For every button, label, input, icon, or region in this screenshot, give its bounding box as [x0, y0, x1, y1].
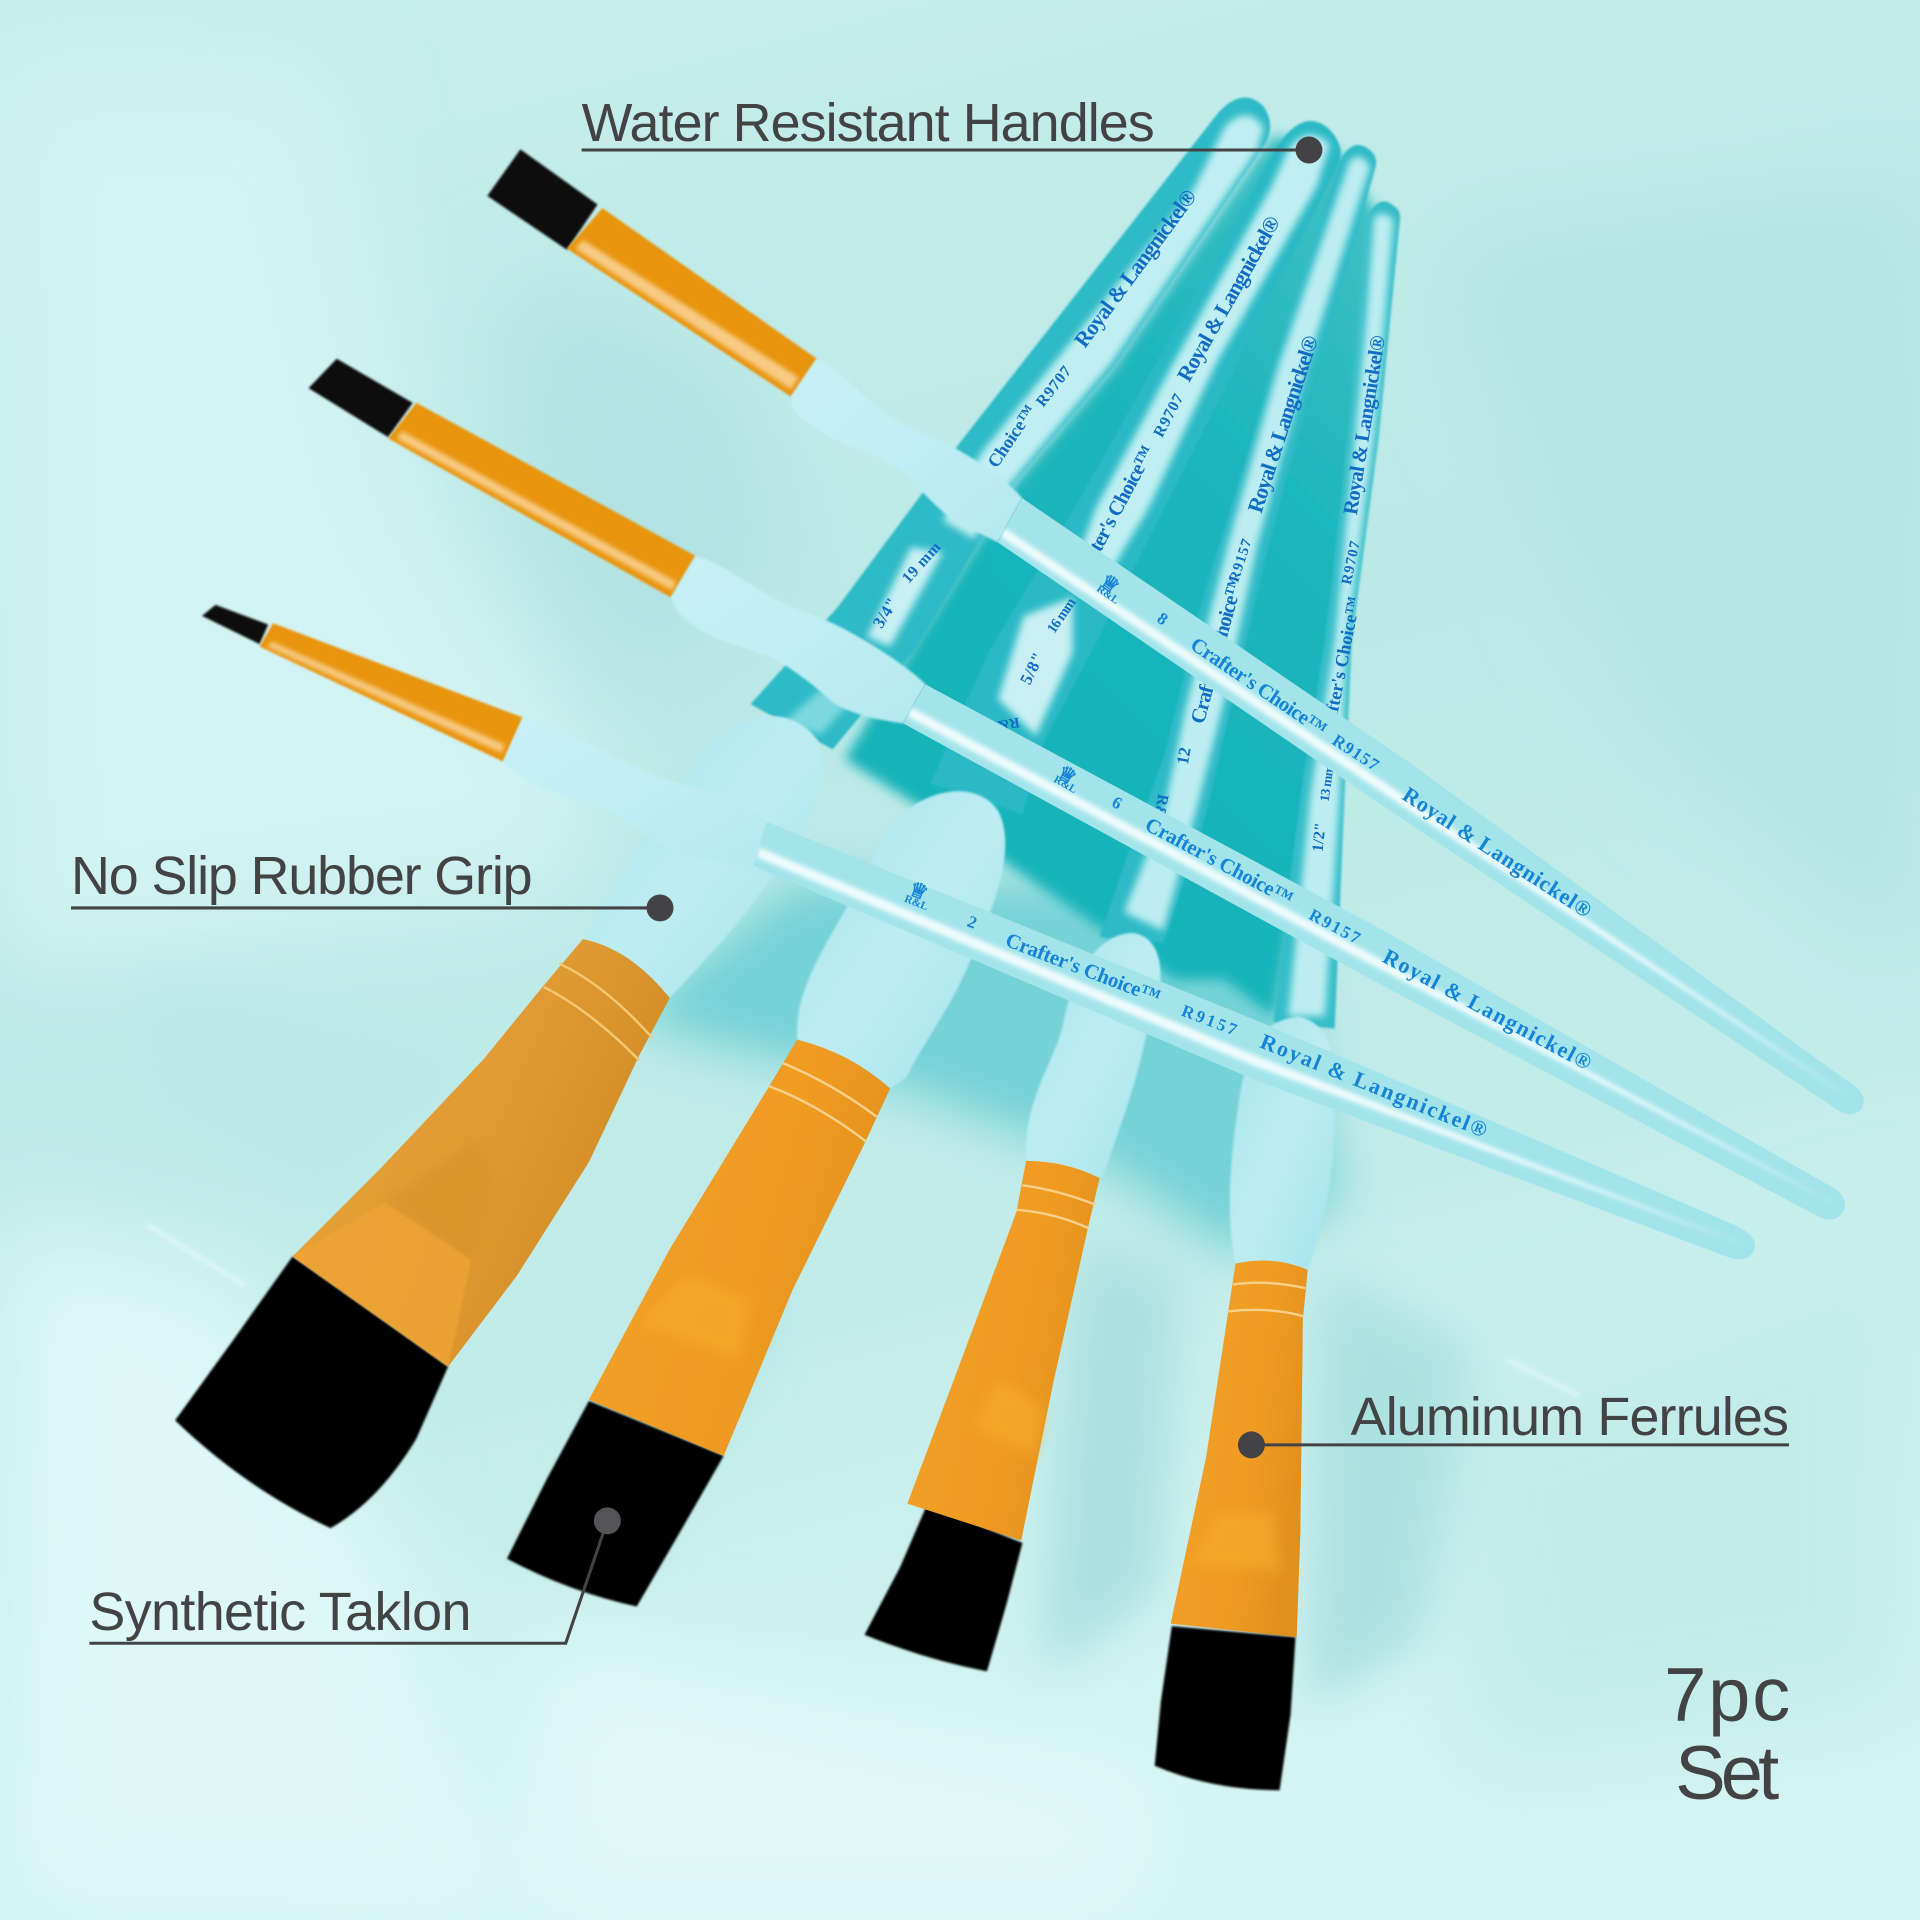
brush 1: handle	[751, 97, 1270, 749]
brush 3: handle	[1100, 145, 1376, 943]
small brush B	[309, 359, 1845, 1220]
small brush C: R9157	[1179, 1001, 1240, 1040]
small brush A: R&L	[1094, 583, 1121, 607]
brush 1: grip	[585, 716, 822, 998]
brush 2: handle: Royal & Langnickel®	[1172, 211, 1285, 386]
brush 1: handle: R9707	[1033, 363, 1075, 410]
callout: Aluminum Ferrules	[1238, 1387, 1789, 1458]
brush 4: handle: Royal & Langnickel®	[1338, 334, 1390, 516]
callout: Water Resistant Handles: Water Resistant Handles	[582, 93, 1155, 153]
brush 1: handle: 19 mm	[899, 539, 944, 587]
brush 4: handle: R9707	[1339, 540, 1364, 586]
small brush A: Crafter's Choice™	[1186, 632, 1332, 741]
brush 4: handle: 1/2"	[1310, 822, 1329, 853]
small brush C: ♕	[905, 876, 932, 906]
set size label	[1664, 1652, 1790, 1816]
small brush C: Crafter's Choice™	[1002, 928, 1164, 1009]
brush 2: aluminum ferrule	[589, 1040, 890, 1456]
brush 2: grip	[797, 791, 1005, 1089]
small brush A: ♕	[1095, 569, 1125, 599]
brush 3: grip	[1026, 933, 1161, 1178]
brush 4: grip	[1230, 1016, 1334, 1270]
small brush A: 8	[1154, 609, 1172, 629]
brush 3: handle: Royal & Langnickel®	[1242, 332, 1323, 516]
brush 1: handle: Choice™	[983, 401, 1040, 471]
set size label: 7pc	[1664, 1652, 1790, 1737]
brush 4: handle: 13 mm	[1317, 764, 1337, 802]
teal reflection between back handles	[845, 135, 1378, 1016]
callout: Synthetic Taklon: Synthetic Taklon	[89, 1582, 471, 1642]
brush 3: handle: Crafter's Choice™	[1185, 573, 1248, 726]
small brush C: R&L	[903, 893, 930, 913]
small brush A	[487, 149, 1864, 1114]
callout: No Slip Rubber Grip: No Slip Rubber Grip	[71, 846, 533, 906]
small brush A: R9157	[1329, 731, 1383, 775]
brush 2: handle: R&L	[986, 714, 1021, 735]
callout: No Slip Rubber Grip	[71, 846, 673, 921]
small brush B: Royal & Langnickel®	[1379, 944, 1596, 1075]
brush 1: hair	[175, 1256, 448, 1528]
small brush C: Royal & Langnickel®	[1257, 1028, 1491, 1142]
brush 4: hair	[1155, 1626, 1296, 1790]
brush 2: handle: Crafter's Choice™	[1066, 441, 1159, 589]
brush 3: handle: R9157	[1227, 537, 1255, 584]
brush 3: handle: R&L	[1148, 793, 1171, 831]
brush 1: handle: 3/4"	[869, 594, 902, 632]
brush 1: handle: Royal & Langnickel®	[1069, 184, 1202, 352]
small brush B: Crafter's Choice™	[1141, 812, 1298, 911]
small brush B: R9157	[1306, 905, 1364, 948]
small brush C: 2	[965, 912, 980, 933]
set size label: Set	[1675, 1731, 1779, 1816]
brush 2: handle	[931, 121, 1341, 814]
callout: Aluminum Ferrules: Aluminum Ferrules	[1351, 1387, 1789, 1447]
brush 3: handle: 12	[1173, 746, 1195, 766]
brush 2: hair	[507, 1401, 724, 1607]
brush 3: hair	[864, 1505, 1022, 1671]
brush 2: handle: 16 mm	[1044, 595, 1080, 637]
small brush B: R&L	[1052, 773, 1079, 796]
brush 4: handle	[1273, 201, 1400, 1029]
brush 4: handle: Crafter's Choice™	[1317, 595, 1364, 743]
small brush B: 6	[1109, 792, 1126, 813]
brush 2: handle: R9707	[1151, 391, 1187, 440]
small brush C	[202, 605, 1755, 1259]
callout: Synthetic Taklon	[89, 1507, 621, 1643]
brush 4: aluminum ferrule	[1171, 1261, 1308, 1637]
callout: Water Resistant Handles	[582, 93, 1322, 163]
brush 2: handle: 5/8"	[1016, 649, 1048, 687]
small brush B: ♕	[1053, 760, 1081, 790]
small brush A: Royal & Langnickel®	[1398, 782, 1597, 923]
brush 3: aluminum ferrule	[907, 1161, 1100, 1540]
brush 1: aluminum ferrule	[293, 939, 670, 1367]
